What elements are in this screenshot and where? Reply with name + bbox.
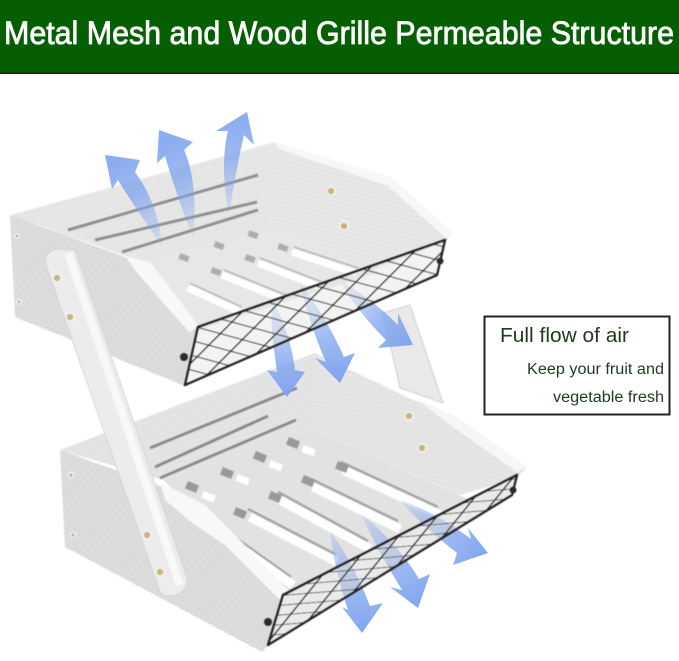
air flow arrows rising through back slits (105, 112, 254, 247)
back wall (60, 353, 315, 480)
right wall (275, 142, 453, 275)
callout heading: Full flow of air (500, 325, 629, 347)
arrow 1 (105, 155, 162, 247)
arrow 3 (216, 112, 254, 215)
arrow 6 (267, 300, 305, 397)
left panel rim (125, 256, 198, 333)
mesh clips (264, 618, 272, 626)
arrow 9 (330, 530, 383, 633)
floor slats (163, 430, 470, 595)
callout: full flow of air (484, 316, 670, 414)
left panel rim (160, 482, 290, 600)
right wall (313, 353, 527, 495)
air flow arrows through lower mesh (330, 500, 488, 633)
arrow 2 (157, 130, 195, 237)
upper metal mesh (180, 240, 445, 385)
slat notches (178, 230, 289, 276)
callout line 1: Keep your fruit and (527, 361, 664, 378)
rear support leg (383, 305, 443, 403)
leg bolts (53, 274, 164, 576)
callout line 2: vegetable fresh (553, 389, 664, 406)
back wall slits (150, 388, 297, 478)
lower basket (60, 353, 527, 652)
arrow 4 (340, 280, 413, 348)
upper basket (10, 142, 453, 386)
left side panel (60, 450, 283, 652)
air flow arrows through upper mesh (267, 280, 413, 397)
floor gaps (188, 252, 356, 312)
back wall slits (68, 175, 258, 252)
floor gaps (226, 462, 438, 577)
floor slats (143, 225, 380, 330)
left side panel (10, 215, 198, 386)
front support leg (45, 249, 187, 596)
mesh clips (180, 353, 188, 361)
arrow 5 (300, 283, 355, 383)
bolts (15, 187, 348, 304)
arrow 7 (400, 500, 488, 565)
slat notches (185, 437, 349, 519)
arrow 8 (362, 515, 430, 608)
back wall (10, 142, 277, 262)
title banner (0, 0, 679, 74)
bolts (68, 412, 426, 538)
lower metal mesh (264, 475, 517, 645)
